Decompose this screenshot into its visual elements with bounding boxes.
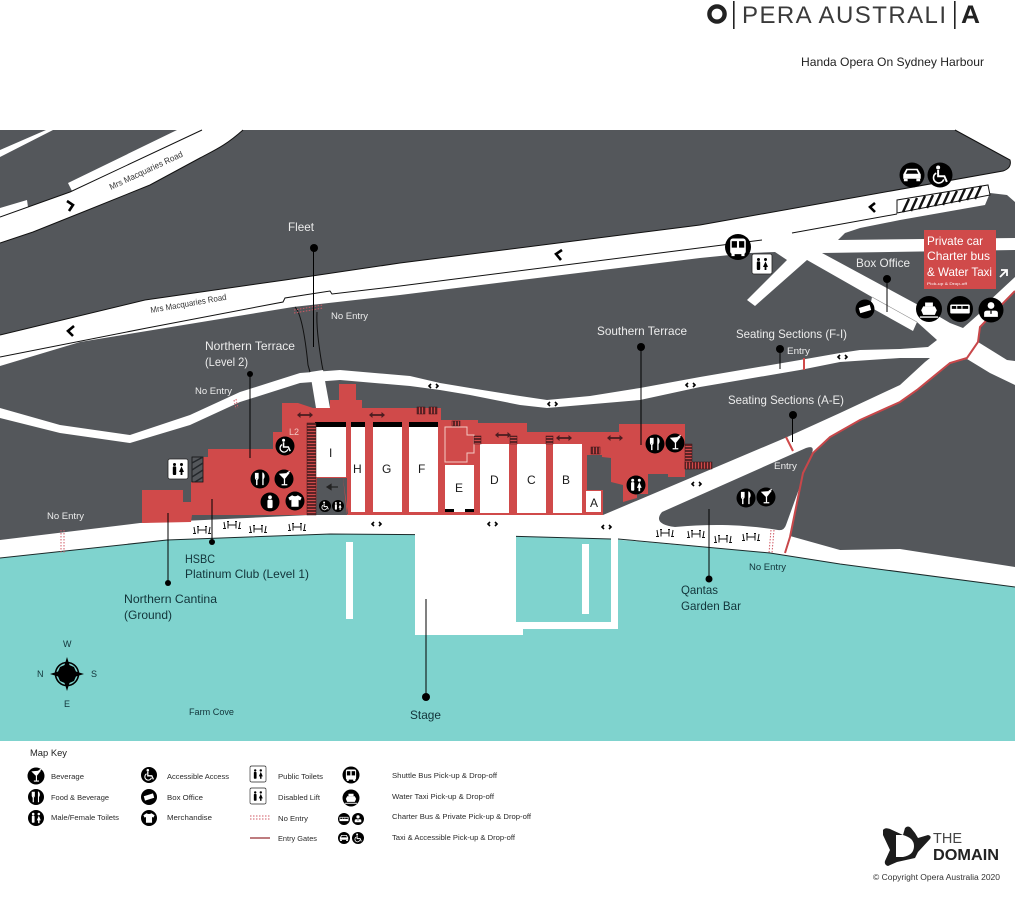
section B: B	[562, 473, 570, 487]
key: food and beverage	[28, 789, 109, 805]
compass: W	[63, 639, 72, 649]
key: charter bus and private	[338, 812, 532, 825]
compass: N	[37, 669, 44, 679]
dark sliver beside lane	[343, 478, 348, 514]
fleet walkway	[310, 370, 330, 408]
key: taxi and accessible	[338, 832, 516, 844]
path direction markers	[372, 355, 847, 529]
icon: public toilets east	[752, 254, 772, 274]
callout: HSBC Platinum Club: Platinum Club (Level 1)	[185, 567, 309, 581]
stairs	[307, 407, 712, 515]
callout: HSBC Platinum Club	[185, 499, 309, 581]
no entry markers	[61, 305, 774, 553]
callout: Northern Terrace: Northern Terrace	[205, 339, 295, 353]
key: disabled lift: Disabled Lift	[278, 793, 321, 802]
section H	[351, 422, 365, 512]
section D: D	[490, 473, 499, 487]
shoreline	[0, 534, 1015, 587]
callout: Qantas Garden Bar: Qantas	[681, 583, 718, 597]
callout: Stage: Stage	[410, 708, 441, 722]
key: public toilets	[250, 766, 323, 782]
box office strip line	[872, 297, 917, 322]
map key	[28, 748, 532, 844]
venue map	[0, 130, 1015, 741]
no entry labels: No Entry	[331, 311, 368, 322]
picnic tables	[193, 522, 760, 542]
key: disabled lift	[250, 788, 321, 804]
callout: Seating Sections F-I: Entry	[787, 346, 810, 357]
panel: private car, charter bus and water taxi: & Water Taxi	[927, 265, 992, 279]
panel: private car, charter bus and water taxi: Charter bus	[927, 249, 990, 263]
section A	[586, 491, 601, 512]
key: charter bus and private: Charter Bus & Private Pick-up & Drop-off	[392, 812, 532, 821]
compass: E	[64, 699, 70, 709]
concourse direction arrows	[297, 412, 623, 441]
no entry labels	[47, 311, 786, 573]
section C: C	[527, 473, 536, 487]
key: water taxi	[342, 790, 495, 806]
road chevrons	[67, 201, 875, 336]
land: dark areas	[0, 130, 1015, 567]
seating sections	[315, 422, 601, 513]
hatched drop-off zone	[897, 185, 990, 213]
entry path red line	[785, 291, 1015, 553]
callout: Seating Sections F-I	[736, 327, 847, 369]
section E: E	[455, 481, 463, 495]
panel: private car, charter bus and water taxi: Pick-up & Drop-off	[927, 281, 968, 286]
key title: Map Key	[30, 748, 67, 759]
key: box office	[141, 789, 203, 805]
section H: H	[353, 462, 362, 476]
key: merchandise	[141, 810, 212, 826]
key: entry gates	[250, 834, 317, 843]
panel: private car, charter bus and water taxi	[924, 230, 996, 289]
callout: Southern Terrace	[597, 324, 687, 445]
section G	[373, 422, 402, 512]
copyright: © Copyright Opera Australia 2020	[873, 873, 1001, 882]
icon: shuttle bus	[725, 234, 751, 260]
callout: Box Office: Box Office	[856, 256, 910, 270]
icons: northern terrace	[250, 436, 344, 512]
key: no entry: No Entry	[278, 814, 308, 823]
brand: Opera Australia logo: PERA AUSTRALI	[742, 2, 946, 29]
subtitle: Handa Opera On Sydney Harbour	[801, 55, 984, 69]
icon: box office ticket	[856, 300, 874, 318]
arrow: towards drop-off	[1000, 270, 1007, 277]
section F: F	[418, 462, 425, 476]
key: beverage: Beverage	[51, 772, 84, 781]
callout: Stage	[410, 599, 441, 722]
key: box office: Box Office	[167, 793, 203, 802]
key: shuttle bus	[342, 766, 498, 784]
road name: lower Mrs Macquaries Road: Mrs Macquaries Road	[150, 292, 227, 315]
section A: A	[590, 496, 598, 510]
no entry labels: No Entry	[195, 386, 232, 397]
icons: taxi and accessible drop-off	[900, 162, 952, 188]
key: entry gates: Entry Gates	[278, 834, 317, 843]
left-pointing arrow in lane	[327, 484, 338, 490]
icon: public toilets west	[168, 459, 188, 479]
label: Farm Cove: Farm Cove	[189, 707, 234, 717]
section I: I	[329, 446, 332, 460]
key: accessible access: Accessible Access	[167, 772, 229, 781]
panel: private car, charter bus and water taxi: Private car	[927, 234, 983, 248]
callout: Northern Terrace	[205, 339, 295, 458]
label: level 2: L2	[289, 427, 299, 437]
key: food and beverage: Food & Beverage	[51, 793, 109, 802]
callout: Seating Sections A-E: Entry	[774, 461, 797, 472]
road name: upper Mrs Macquaries Road: Mrs Macquaries Road	[108, 149, 185, 192]
water	[0, 534, 1015, 741]
callout: Qantas Garden Bar	[681, 509, 741, 613]
entry gates	[786, 358, 804, 451]
red venue footprint	[142, 384, 685, 523]
brand: The Domain logo	[883, 826, 999, 866]
brand: The Domain logo: DOMAIN	[933, 847, 999, 864]
callout: Southern Terrace: Southern Terrace	[597, 324, 687, 338]
callout: Seating Sections A-E: Seating Sections (A-E)	[728, 393, 844, 407]
callout: HSBC Platinum Club: HSBC	[185, 552, 215, 566]
compass: S	[91, 669, 97, 679]
brand: Opera Australia logo: A	[961, 1, 980, 29]
brand: The Domain logo: THE	[933, 830, 962, 847]
stage platform	[415, 534, 618, 635]
no entry labels: No Entry	[749, 562, 786, 573]
section G: G	[382, 462, 391, 476]
icons: ferry, coach, private driver	[916, 296, 1004, 322]
callout: Northern Cantina: Northern Cantina	[124, 592, 217, 606]
key: taxi and accessible: Taxi & Accessible Pick-up & Drop-off	[392, 833, 516, 842]
key: shuttle bus: Shuttle Bus Pick-up & Drop-off	[392, 771, 498, 780]
no entry labels: No Entry	[47, 511, 84, 522]
hatched lift block	[192, 457, 203, 482]
section E	[445, 465, 474, 512]
callout: Fleet: Fleet	[288, 220, 315, 234]
jetty bars	[346, 542, 589, 619]
key: toilets: Male/Female Toilets	[51, 813, 119, 822]
callout: Fleet	[288, 220, 318, 347]
icons: southern terrace	[626, 434, 684, 494]
section C	[517, 444, 546, 513]
callout: Box Office	[856, 256, 910, 312]
callout: Northern Cantina: (Ground)	[124, 608, 172, 622]
key: water taxi: Water Taxi Pick-up & Drop-off	[392, 792, 495, 801]
callout: Qantas Garden Bar: Garden Bar	[681, 599, 741, 613]
key: accessible access	[141, 767, 229, 783]
callout: Northern Terrace: (Level 2)	[205, 355, 248, 369]
key: public toilets: Public Toilets	[278, 772, 323, 781]
key: toilets	[28, 810, 119, 826]
callout: Seating Sections A-E	[728, 393, 844, 472]
icons: garden bar	[736, 488, 776, 508]
key: no entry	[250, 814, 308, 823]
road edge lines	[0, 130, 1010, 372]
callout: Northern Cantina	[124, 513, 217, 622]
section D	[480, 444, 509, 513]
section I	[315, 422, 346, 477]
section F	[409, 422, 438, 512]
key: beverage	[28, 768, 84, 784]
callout: Seating Sections F-I: Seating Sections (F-I)	[736, 327, 847, 341]
outlined control area	[445, 427, 474, 462]
section B	[553, 444, 582, 513]
compass	[37, 639, 97, 709]
key: merchandise: Merchandise	[167, 813, 212, 822]
